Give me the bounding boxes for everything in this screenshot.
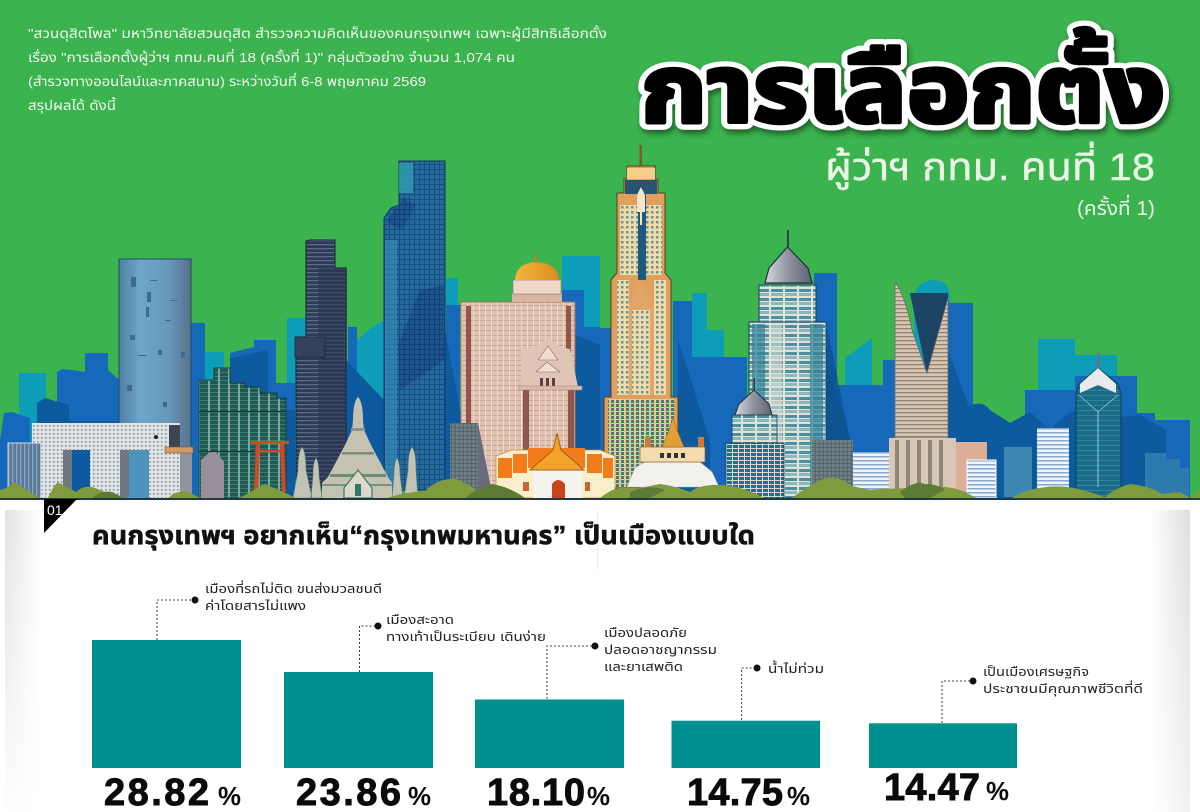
ground line [0,498,1200,500]
building: classical pink tower [519,338,582,498]
bar 5: 14.47% [869,723,1017,809]
background teal silhouettes [19,256,1189,499]
building: low striped block [853,452,889,492]
green header background [0,0,1200,499]
callout 5 [942,665,1143,723]
section number tag 01: 01 [47,502,63,518]
intro text: survey description [28,25,607,113]
building: small glass tower [726,322,850,498]
callout 4: น้ำไม่ท่วม [768,660,824,676]
callout 1: ค่าโดยสารไม่แพง [205,599,306,613]
building: blue block [1004,447,1032,497]
bar 1: 28.82%: % [218,781,241,811]
landmark: Wat Arun [293,397,418,498]
white results panel background [0,499,1200,812]
callout 3: ปลอดอาชญากรรม [604,643,717,657]
building: sail tower [889,282,956,492]
callout 1 [157,580,382,640]
callout 3: เมืองปลอดภัย [604,626,687,640]
callout 2 [360,613,546,672]
title: election: การเลือกตั้ง [641,27,1165,142]
building: small blue-grey block [8,443,41,498]
callout 3: และยาเสพติด [604,660,683,674]
bar 5: 14.47%: % [986,776,1009,806]
building: white striped block [1037,428,1069,490]
background dark blue silhouettes [37,330,1166,499]
bar 2: 23.86% [284,672,433,812]
bar 2: 23.86%: % [408,781,431,811]
bar 3: 18.10%: % [587,781,610,811]
building: right low blue block [1145,453,1189,498]
bar 3: 18.10% [475,700,624,812]
callout 2: เมืองสะอาด [386,613,454,627]
building: white grid frame [32,423,193,498]
intro text: survey description: "สวนดุสิตโพล" มหาวิทยาลัยสวนดุสิต สำรวจความคิดเห็นของคนกรุงเทพฯ เฉพาะผู้มีสิทธิเลือกตั้ง [28,25,607,41]
bar 4: 14.75% [672,721,820,812]
bar chart [92,580,1143,812]
building: teal diamond tower [1076,353,1121,498]
landmark: Baiyoke tower [604,145,678,488]
callout 5: ประชาชนมีคุณภาพชีวิตที่ดี [983,680,1143,696]
intro text: survey description: สรุปผลได้ ดังนี้ [28,96,116,113]
intro text: survey description: (สำรวจทางออนไลน์และภาคสนาม) ระหว่างวันที่ 6-8 พฤษภาคม 2569 [28,72,426,89]
building: grey block [450,423,493,498]
callout 3 [547,626,717,699]
subtitle: round 1: (ครั้งที่ 1) [1077,194,1155,220]
building: dark green stepped tower [199,368,286,498]
title: election: การเลือกตั้ง [641,27,1165,142]
building: small purple-grey tower [201,452,224,498]
subtitle: governor number 18: ผู้ว่าฯ กทม. คนที่ 18 [825,141,1155,190]
building: glass tower with pointed cap [749,230,826,498]
building: grey low block [812,440,853,492]
bar 5: 14.47%: 14.47 [884,767,980,809]
building: Mahanakhon tower [384,161,445,490]
building: pink domed tower [461,253,575,498]
landmark: Golden Mount [627,417,719,487]
building: blue cylinder tower [119,259,191,459]
bar 1: 28.82% [92,640,241,812]
landmark: giant swing [251,441,289,492]
background blue silhouettes [0,273,1190,499]
building: dark twin tower [295,240,347,490]
callout 1: เมืองที่รถไม่ติด ขนส่งมวลชนดี [205,580,382,596]
callout 4 [742,660,824,720]
trees [0,478,1200,498]
landmark: golden dome [515,262,559,280]
building: pink and white low blocks [956,442,996,498]
callout 2: ทางเท้าเป็นระเบียบ เดินง่าย [386,630,546,644]
bar 4: 14.75%: % [787,781,810,811]
intro text: survey description: เรื่อง "การเลือกตั้งผู้ว่าฯ กทม.คนที่ 18 (ครั้งที่ 1)" กลุ่มตัวอย่าง จำนวน 1,074 คน [28,48,515,65]
landmark: Marble Temple [496,433,615,498]
skyline illustration [0,145,1200,499]
section number tag 01 [44,499,77,533]
section heading: คนกรุงเทพฯ อยากเห็น“กรุงเทพมหานคร” เป็นเมืองแบบใด [92,520,755,551]
callout 5: เป็นเมืองเศรษฐกิจ [983,665,1089,679]
